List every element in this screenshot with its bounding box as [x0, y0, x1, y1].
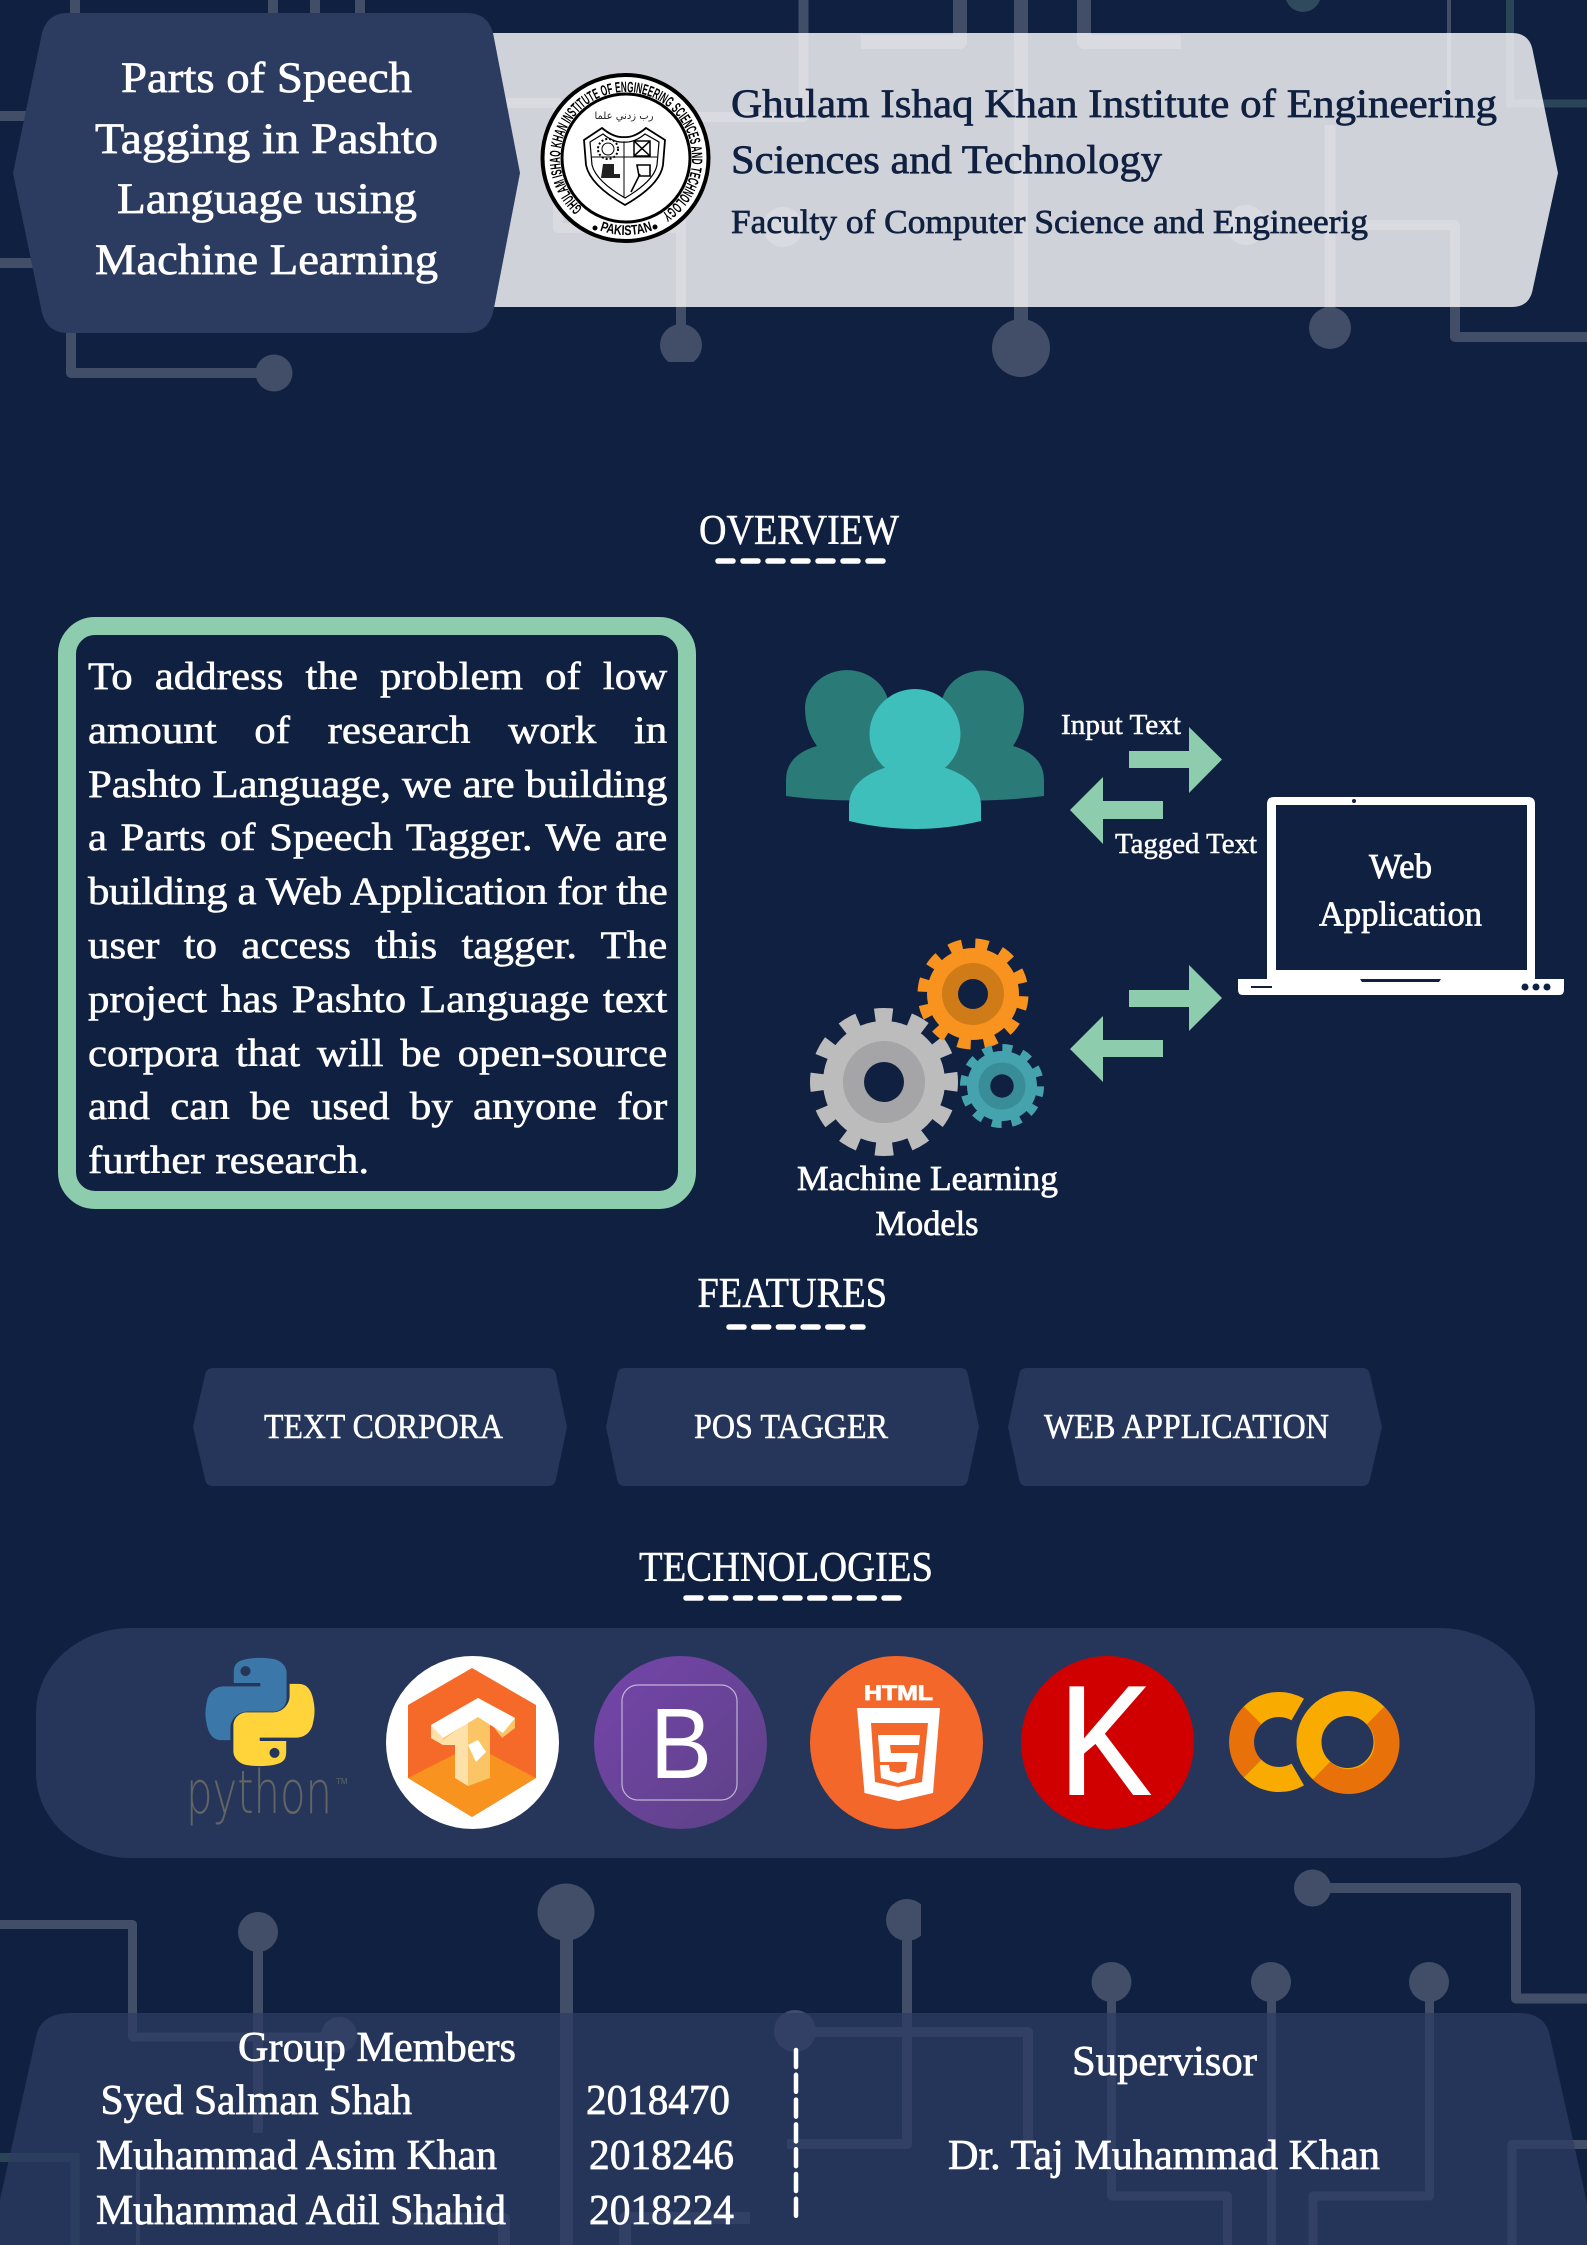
overview paragraph: To address the problem of low: [88, 655, 667, 698]
group members: Muhammad Asim Khan: [96, 2133, 497, 2179]
overview paragraph: [88, 655, 668, 1182]
heading: overview: OVERVIEW: [699, 508, 899, 554]
institute logo: رب زدني علما: [594, 111, 654, 122]
title panel: Language using: [117, 176, 417, 223]
icon: bootstrap: [594, 1656, 767, 1829]
group members: Muhammad Adil Shahid: [96, 2188, 506, 2234]
label: machine learning models: Machine Learning: [797, 1159, 1058, 1198]
icon: keras: [1021, 1654, 1194, 1829]
icon: gears: [817, 936, 1045, 1149]
icon: keras: K: [1059, 1654, 1151, 1827]
label: machine learning models: Models: [876, 1204, 978, 1243]
icon: python: [186, 1658, 348, 1828]
overview paragraph: amount of research work in: [88, 709, 667, 752]
icon: colab: [1242, 1704, 1387, 1782]
supervisor: Supervisor: [1072, 2039, 1257, 2085]
icon: python: TM: [336, 1777, 348, 1786]
title panel: Machine Learning: [95, 237, 438, 284]
title panel: [13, 13, 520, 333]
feature: pos tagger: POS TAGGER: [694, 1407, 889, 1446]
header banner: institute: Sciences and Technology: [731, 137, 1162, 182]
group members: 2018246: [589, 2133, 734, 2179]
overview paragraph: further research.: [88, 1139, 369, 1182]
header banner: institute: [492, 33, 1558, 307]
overview paragraph: project has Pashto Language text: [88, 978, 667, 1021]
icon: laptop: Web: [1369, 847, 1432, 886]
feature: pos tagger: [606, 1368, 979, 1486]
overview paragraph: user to access this tagger. The: [88, 924, 667, 967]
icon: laptop: [1238, 797, 1564, 995]
overview paragraph: and can be used by anyone for: [88, 1085, 667, 1128]
icon: bootstrap: B: [650, 1688, 712, 1800]
title panel: Parts of Speech: [121, 55, 412, 102]
icon: tensorflow: [386, 1656, 559, 1829]
icon: python: python: [186, 1758, 332, 1828]
arrow: to web application: [1129, 965, 1222, 1031]
group members: [96, 2025, 734, 2234]
institute name: Ghulam Ishaq Khan Institute of Engineering: [731, 81, 1497, 126]
panel: technologies: [36, 1628, 1535, 1858]
arrow: input text: [1129, 727, 1222, 793]
title panel: Tagging in Pashto: [95, 116, 438, 163]
overview paragraph: Pashto Language, we are building: [88, 763, 667, 806]
icon: html5: HTML: [864, 1682, 933, 1705]
circuit background: top: [0, 0, 1587, 392]
icon: users: [786, 670, 1044, 829]
overview paragraph: a Parts of Speech Tagger. We are: [88, 816, 667, 859]
icon: laptop: Application: [1319, 894, 1482, 934]
overview paragraph: building a Web Application for the: [88, 870, 667, 913]
heading: technologies: TECHNOLOGIES: [639, 1545, 933, 1591]
circuit background: bottom: [0, 1870, 1587, 2245]
institute logo: GHULAM ISHAQ KHAN INSTITUTE OF ENGINEERING SCIENCES AND TECHNOLOGY: [550, 82, 702, 222]
group members: 2018224: [589, 2188, 734, 2234]
label: input text: Input Text: [1061, 710, 1181, 741]
feature: text corpora: [193, 1368, 567, 1486]
feature: web application: [1008, 1368, 1382, 1486]
panel: team: [0, 2013, 1587, 2245]
label: tagged text: Tagged Text: [1115, 829, 1257, 860]
overview paragraph: corpora that will be open-source: [88, 1032, 667, 1075]
feature: text corpora: TEXT CORPORA: [264, 1407, 504, 1446]
label: machine learning models: [797, 1159, 1058, 1243]
heading: features: FEATURES: [698, 1271, 887, 1317]
group members: Syed Salman Shah: [100, 2078, 412, 2124]
group members: Group Members: [238, 2025, 516, 2071]
group members: 2018470: [586, 2078, 730, 2124]
feature: web application: WEB APPLICATION: [1044, 1407, 1329, 1446]
overview text box border: [67, 626, 687, 1200]
supervisor: [948, 2039, 1380, 2179]
supervisor: Dr. Taj Muhammad Khan: [948, 2133, 1380, 2179]
faculty name: Faculty of Computer Science and Engineerig: [731, 204, 1368, 241]
institute logo: PAKISTAN: [600, 221, 652, 236]
icon: html5: [810, 1656, 983, 1829]
arrow: from web application: [1070, 1016, 1163, 1082]
arrow: tagged text: [1070, 777, 1163, 844]
